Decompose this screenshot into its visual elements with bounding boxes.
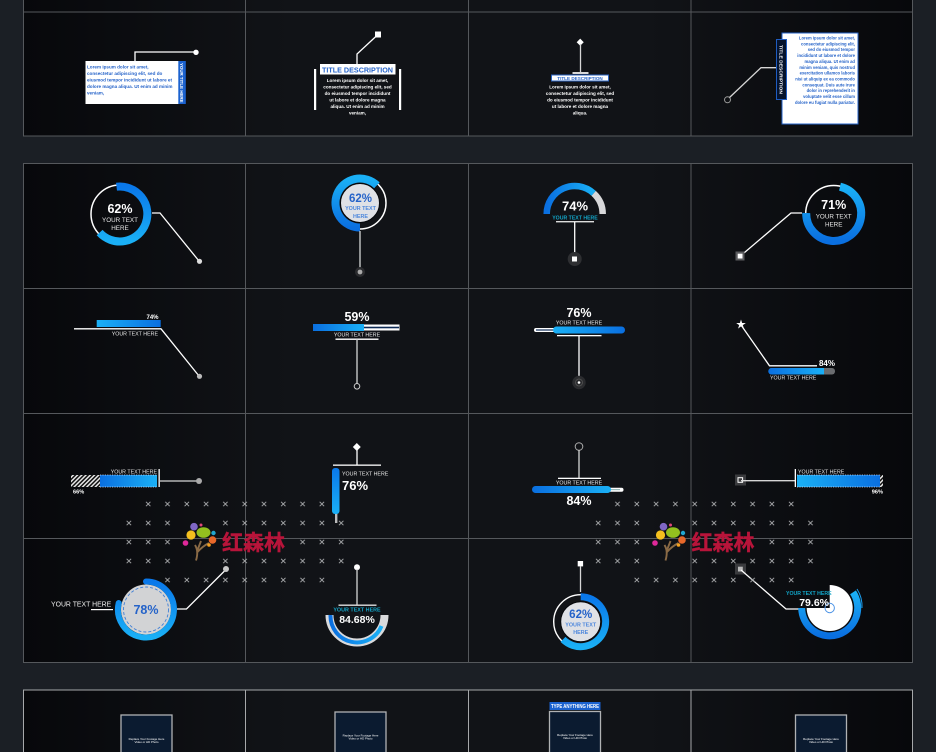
placeholder frame 3 with label: Replace Your Footage Here xyxy=(557,733,593,737)
bar chart: 84%: YOUR TEXT HERE xyxy=(770,376,817,382)
bar chart: 76% xyxy=(534,306,625,389)
donut chart: 62% light centre: YOUR TEXT xyxy=(345,206,377,212)
callout: title description above text: Lorem ipsum dolor sit amet, xyxy=(549,84,611,90)
placeholder frame 4 xyxy=(796,715,846,752)
callout: tall white box with vertical title tab: dolor in reprehenderit in xyxy=(807,88,855,93)
gauge: 74% xyxy=(547,186,603,266)
callout: tall white box with vertical title tab: consectetur adipiscing elit, xyxy=(801,41,855,46)
donut chart: 62% light centre: HERE xyxy=(353,214,368,220)
bar chart: 74%: YOUR TEXT HERE xyxy=(112,331,158,337)
donut chart: 71%: 71% xyxy=(821,198,846,212)
callout: tall white box with vertical title tab: dolore eu fugiat nulla pariatur. xyxy=(795,100,855,105)
bar chart: 59%: 59% xyxy=(344,310,370,324)
donut chart: 62%: HERE xyxy=(111,225,129,232)
callout: title description above text: TITLE DESCRIPTION xyxy=(557,76,603,81)
logo: tree xyxy=(652,523,686,560)
placeholder frame 4: Video or HD Photo xyxy=(809,740,833,744)
panel: footage placeholders xyxy=(24,690,912,752)
callout: blue text on white box with side title: Lorem ipsum dolor sit amet, xyxy=(87,64,149,70)
placeholder frame 2: Replace Your Footage Here xyxy=(343,734,379,738)
bar chart: 96% hatched xyxy=(735,469,883,495)
placeholder frame 3 with label: Video or HD Photo xyxy=(563,736,587,740)
donut chart: 78%: 78% xyxy=(133,603,159,617)
placeholder frame 3 with label: TYPE ANYTHING HERE xyxy=(551,704,600,710)
callout: blue text on white box with side title: veniam, xyxy=(87,90,104,96)
logo: wordmark: 红森林 xyxy=(692,532,754,555)
gauge: 74%: 74% xyxy=(562,198,588,214)
callout: tall white box with vertical title tab: minim veniam, quis nostrud xyxy=(799,65,855,70)
panel: text callouts xyxy=(24,0,912,136)
gauge: 74%: YOUR TEXT HERE xyxy=(552,216,598,222)
callout: tall white box with vertical title tab: magna aliqua. Ut enim ad xyxy=(804,59,855,64)
bar chart: 59%: YOUR TEXT HERE xyxy=(334,333,381,339)
bar chart: 74%: 74% xyxy=(146,315,159,321)
callout: title description with side bars: veniam, xyxy=(349,110,366,115)
donut chart: 62% light centre bottom: YOUR TEXT xyxy=(565,622,597,628)
vertical bar chart: 76% xyxy=(332,443,389,523)
pie chart: 79.6%: YOUR TEXT HERE xyxy=(786,591,832,597)
callout: tall white box with vertical title tab: consequat. Duis aute irure xyxy=(802,82,856,87)
bar chart: 76%: 76% xyxy=(566,306,592,320)
callout: blue text on white box with side title: YOUR TITLE HERE xyxy=(179,63,184,103)
donut chart: 62% light centre bottom xyxy=(554,561,608,649)
callout: title description with side bars: do eiusmod tempor incididunt xyxy=(325,91,391,96)
bar chart: 84% with ring marker: 84% xyxy=(566,494,592,508)
logo: wordmark: 红森林 xyxy=(222,532,285,555)
callout: title description above text: aliqua. xyxy=(573,110,587,116)
callout: tall white box with vertical title tab: Lorem ipsum dolor sit amet, xyxy=(799,36,855,40)
bar chart: 84% xyxy=(736,320,835,382)
bar chart: 66% hatched xyxy=(71,469,202,495)
callout: title description above text xyxy=(546,39,614,116)
placeholder frame 1 xyxy=(121,715,172,752)
callout: title description with side bars: aliqua. Ut enim ad minim xyxy=(330,104,385,109)
donut chart: 62% xyxy=(91,185,202,264)
callout: title description above text: ut labore et dolore magna xyxy=(552,104,609,109)
bar chart: 66% hatched: YOUR TEXT HERE xyxy=(111,470,157,476)
callout: tall white box with vertical title tab: voluptate velit esse cillum xyxy=(803,94,855,99)
panel: charts grid xyxy=(24,164,912,662)
callout: title description with side bars: ut labore et dolore magna xyxy=(329,97,386,102)
callout: title description above text: do eiusmod tempor incididunt xyxy=(547,98,613,102)
placeholder frame 3 with label xyxy=(550,702,600,752)
callout: tall white box with vertical title tab: nisi ut aliquip ex ea commodo xyxy=(795,76,855,82)
donut chart: 62% light centre bottom: 62% xyxy=(569,609,592,621)
bar chart: 59% xyxy=(313,310,400,389)
placeholder frame 4: Replace Your Footage Here xyxy=(803,737,839,741)
donut chart: 62% light centre: 62% xyxy=(349,193,372,205)
gauge: 84.68%: 84.68% xyxy=(339,614,375,626)
donut chart: 62% light centre bottom: HERE xyxy=(573,630,589,636)
callout: tall white box with vertical title tab xyxy=(724,33,858,124)
bar chart: 84% with ring marker xyxy=(532,443,624,508)
donut chart: 71% xyxy=(736,186,862,260)
pie chart: 79.6%: 79.6% xyxy=(799,597,830,609)
callout: blue text on white box with side title: eiusmod tempor incididunt ut labore et xyxy=(87,78,172,82)
callout: title description with side bars: TITLE DESCRIPTION xyxy=(322,65,393,74)
callout: tall white box with vertical title tab: exercitation ullamco laboris xyxy=(800,71,856,76)
donut chart: 62%: YOUR TEXT xyxy=(102,217,138,224)
watermark: left cross grid and logo xyxy=(119,494,351,590)
callout: title description with side bars: consectetur adipiscing elit, sed xyxy=(323,84,392,89)
donut chart: 62% light centre xyxy=(334,177,386,277)
placeholder frame 1: Video or HD Photo xyxy=(134,740,159,744)
callout: tall white box with vertical title tab: TITLE DESCRIPTION xyxy=(778,45,784,94)
placeholder frame 2 xyxy=(335,712,386,752)
bar chart: 76%: YOUR TEXT HERE xyxy=(556,320,603,326)
bar chart: 96% hatched: YOUR TEXT HERE xyxy=(798,469,845,475)
donut chart: 71%: HERE xyxy=(825,222,842,228)
pie chart: 79.6% xyxy=(735,564,862,636)
watermark: right cross grid and logo xyxy=(588,494,820,590)
bar chart: 84% with ring marker: YOUR TEXT HERE xyxy=(556,480,603,486)
bar chart: 74% xyxy=(74,315,202,379)
placeholder frame 2: Video or HD Photo xyxy=(348,736,373,740)
donut chart: 71%: YOUR TEXT xyxy=(816,214,852,220)
callout: tall white box with vertical title tab: incididunt ut labore et dolore xyxy=(797,53,856,58)
callout: title description with side bars xyxy=(314,32,401,115)
bar chart: 84%: 84% xyxy=(819,359,835,368)
donut chart: 78%: YOUR TEXT HERE xyxy=(51,602,112,608)
gauge: 84.68% xyxy=(330,564,384,642)
callout: title description above text: consectetur adipiscing elit, sed xyxy=(546,91,614,96)
callout: blue text on white box with side title: consectetur adipiscing elit, sed do xyxy=(87,71,162,76)
callout: title description with side bars: Lorem ipsum dolor sit amet, xyxy=(327,78,388,83)
bar chart: 84%: ★ xyxy=(736,320,746,331)
vertical bar chart: 76%: YOUR TEXT HERE xyxy=(342,472,389,478)
placeholder frame 1: Replace Your Footage Here xyxy=(129,737,165,741)
vertical bar chart: 76%: 76% xyxy=(342,478,368,493)
donut chart: 62%: 62% xyxy=(107,202,133,216)
bar chart: 96% hatched: 96% xyxy=(872,489,883,495)
callout: blue text on white box with side title xyxy=(86,50,199,104)
callout: blue text on white box with side title: dolore magna aliqua. Ut enim ad minim xyxy=(87,84,173,89)
bar chart: 66% hatched: 66% xyxy=(73,489,84,495)
logo: tree xyxy=(183,523,216,560)
gauge: 84.68%: YOUR TEXT HERE xyxy=(333,608,381,614)
callout: tall white box with vertical title tab: sed do eiusmod tempor xyxy=(808,47,855,52)
donut chart: 78% xyxy=(51,566,229,638)
